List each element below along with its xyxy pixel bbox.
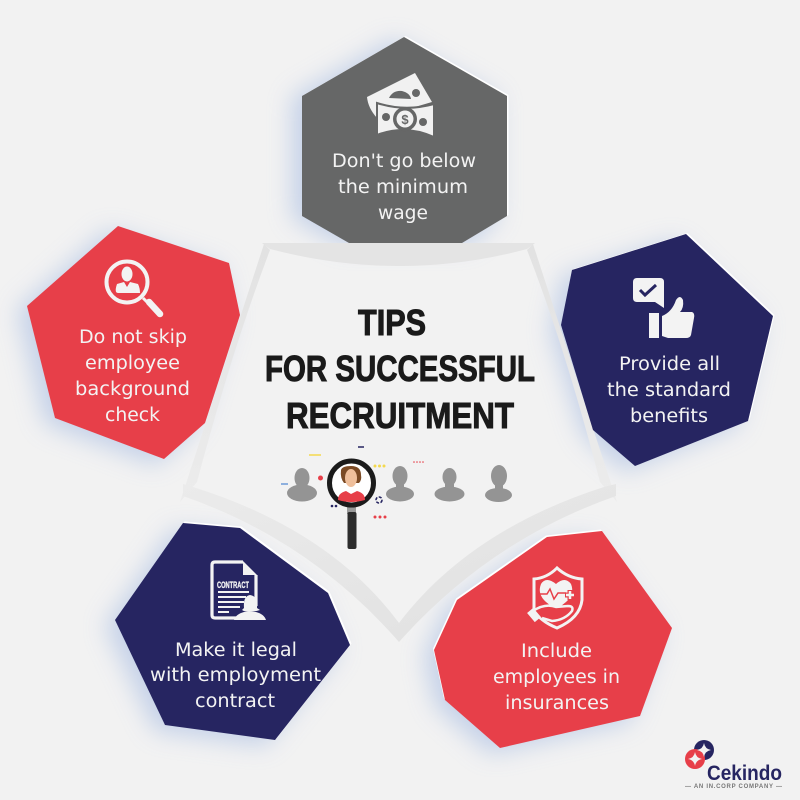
red polygon: [433, 530, 672, 748]
icon: thumbs up with check bubble: [633, 278, 694, 338]
text: make it legal: with employment: [150, 665, 321, 686]
text: do not skip: Do not skip: [79, 327, 187, 348]
icon: banknotes: $: [401, 112, 409, 127]
icon: contract document: CONTRACT: [217, 580, 249, 591]
icon: contract document: [212, 561, 266, 620]
decorative dots: [281, 447, 424, 518]
panel: employment contract: [115, 522, 352, 740]
icon: candidate silhouette 4: [485, 465, 512, 502]
text: provide all: [607, 354, 731, 427]
icon: candidate silhouette 2: [386, 466, 414, 502]
illustration: candidates under magnifier: [281, 447, 512, 549]
logo mark: [685, 740, 714, 769]
text: do not skip: background: [75, 379, 190, 400]
navy polygon: [115, 522, 352, 740]
text: provide all: Provide all: [619, 354, 720, 375]
text: make it legal: [150, 640, 321, 712]
grey hexagon: [302, 36, 508, 243]
text: don't go below: [332, 151, 476, 224]
icon: candidate silhouette 3: [434, 468, 464, 502]
text: do not skip: check: [105, 405, 160, 426]
logo wordmark: Cekindo: [707, 762, 782, 785]
text: do not skip: [75, 327, 190, 426]
text: provide all: benefits: [630, 406, 708, 427]
logo tagline: — AN IN.CORP COMPANY —: [685, 784, 782, 790]
panel: background check: [27, 226, 240, 459]
text: do not skip: employee: [85, 353, 180, 374]
icon: magnifier with selected candidate: [330, 461, 374, 549]
text: don't go below: Don't go below: [332, 151, 476, 172]
panel: minimum wage: [302, 36, 508, 243]
icon: shield with heart and hand: [527, 568, 582, 628]
text: include employees: [493, 641, 620, 714]
text: don't go below: wage: [378, 203, 428, 224]
text: provide all: the standard: [607, 380, 731, 401]
title: FOR SUCCESSFUL: [265, 348, 535, 389]
title: [265, 302, 535, 436]
navy heptagon: [561, 233, 774, 466]
icon: magnifier with person: [106, 262, 160, 314]
panel: insurances: [433, 530, 672, 748]
panel: standard benefits: [561, 233, 774, 466]
icon: banknotes: [367, 73, 434, 137]
title: RECRUITMENT: [286, 395, 514, 436]
icon: candidate silhouette 1: [287, 468, 317, 502]
text: make it legal: Make it legal: [175, 640, 297, 661]
central pentagon frame: [180, 243, 617, 642]
logo: Cekindo: [685, 740, 782, 790]
text: include employees: employees in: [493, 667, 620, 688]
text: make it legal: contract: [195, 691, 275, 712]
text: don't go below: the minimum: [338, 177, 468, 198]
text: include employees: Include: [521, 641, 592, 662]
text: include employees: insurances: [505, 693, 609, 714]
red polygon: [27, 226, 240, 459]
title: TIPS: [358, 302, 426, 343]
